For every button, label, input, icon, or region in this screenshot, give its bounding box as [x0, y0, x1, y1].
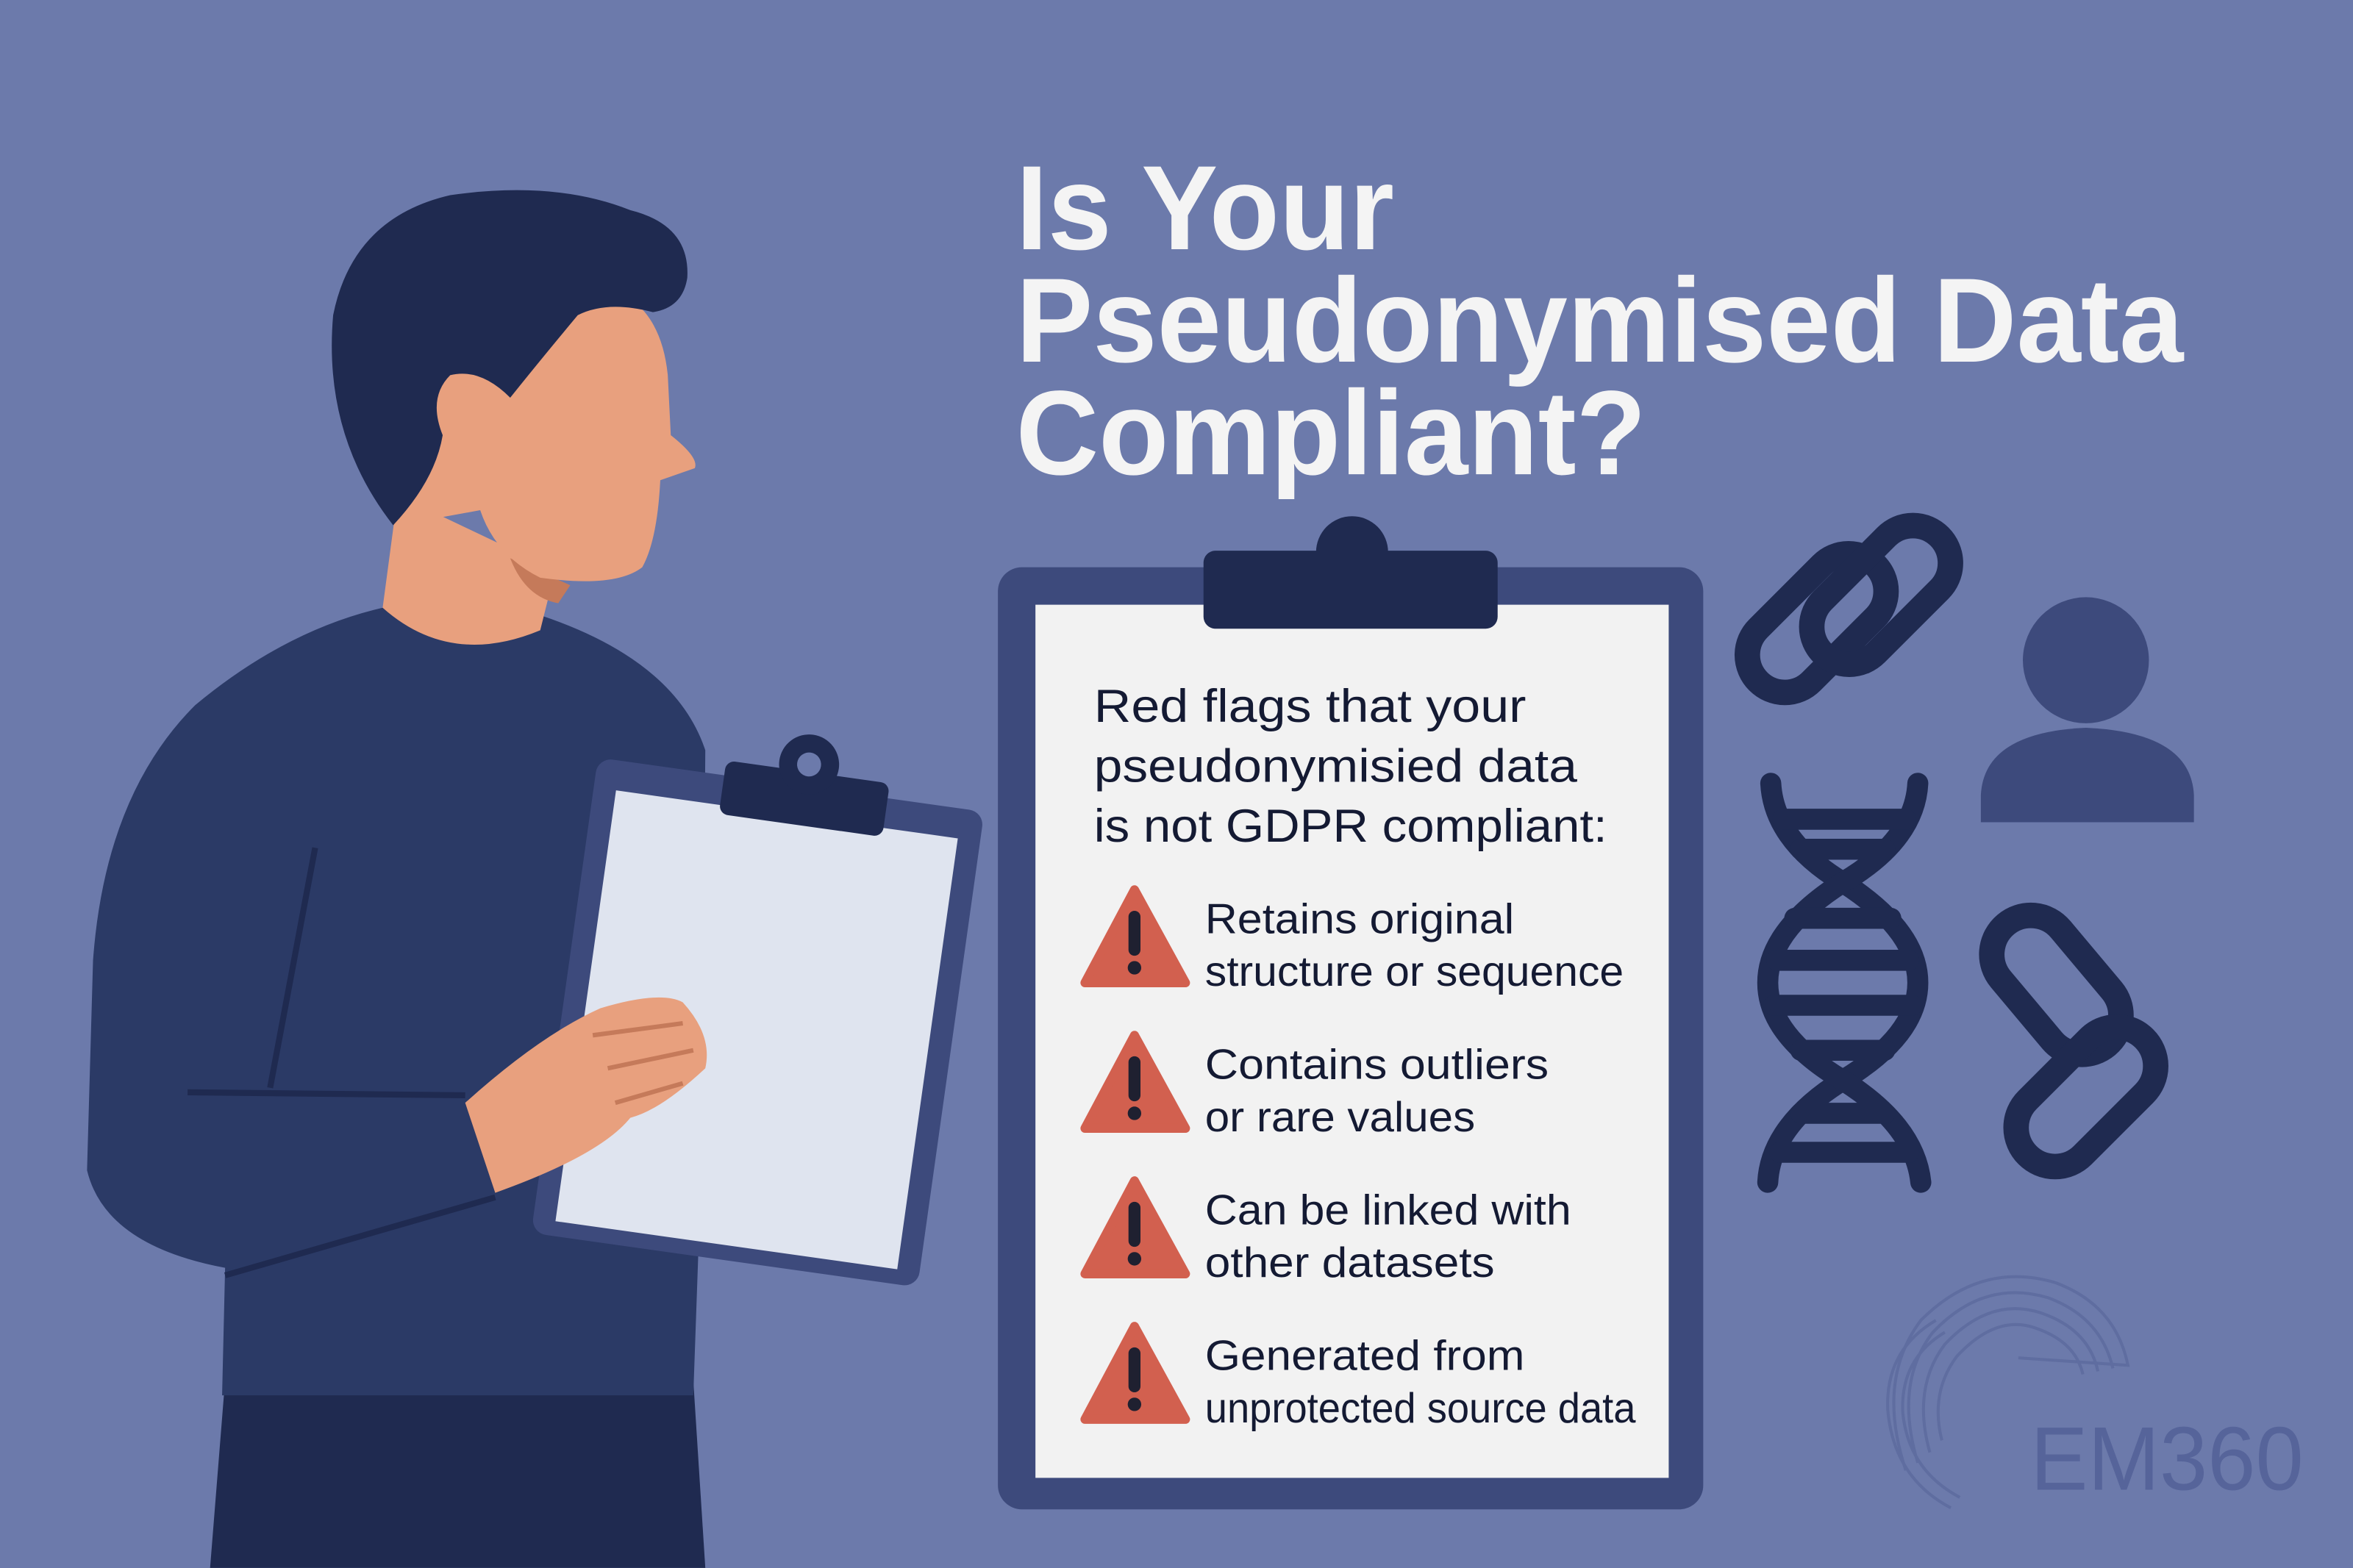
heading: is not GDPR compliant:: [1094, 801, 1607, 852]
flag items: [1205, 896, 1636, 1432]
held clipboard: [531, 706, 992, 1287]
flag items: structure or sequence: [1205, 948, 1624, 995]
legs: [210, 1381, 705, 1568]
heading: pseudonymisied data: [1094, 740, 1578, 792]
title: [1016, 140, 2185, 500]
icon: DNA helix: [1768, 783, 1921, 1182]
title: Compliant?: [1016, 365, 1646, 500]
icon: chain link top: [1732, 510, 1966, 708]
icon: person silhouette: [1981, 597, 2194, 823]
flag items: Can be linked with: [1205, 1186, 1571, 1234]
flag items: Generated from: [1205, 1332, 1524, 1379]
neck: [382, 495, 555, 645]
warning icons: [1085, 889, 1185, 1420]
flag items: other datasets: [1205, 1239, 1495, 1286]
logo: EM360: [1888, 1277, 2304, 1509]
logo: EM360: EM360: [2030, 1408, 2304, 1509]
flag items: or rare values: [1205, 1094, 1475, 1141]
flag items: Contains outliers: [1205, 1042, 1549, 1089]
head: [398, 273, 696, 581]
hand: [465, 998, 707, 1193]
title: Is Your: [1016, 140, 1394, 275]
flag items: Retains original: [1205, 896, 1514, 943]
clipboard panel: red flags: [998, 516, 1703, 1509]
hair: [332, 190, 688, 525]
person illustration: [87, 190, 992, 1568]
heading: Red flags that your: [1094, 681, 1527, 732]
torso / sweater: [87, 608, 705, 1395]
flag items: unprotected source data: [1205, 1385, 1636, 1432]
heading: [1094, 681, 1607, 852]
icon: chain link bottom: [1976, 900, 2172, 1183]
title: Pseudonymised Data: [1016, 253, 2185, 387]
